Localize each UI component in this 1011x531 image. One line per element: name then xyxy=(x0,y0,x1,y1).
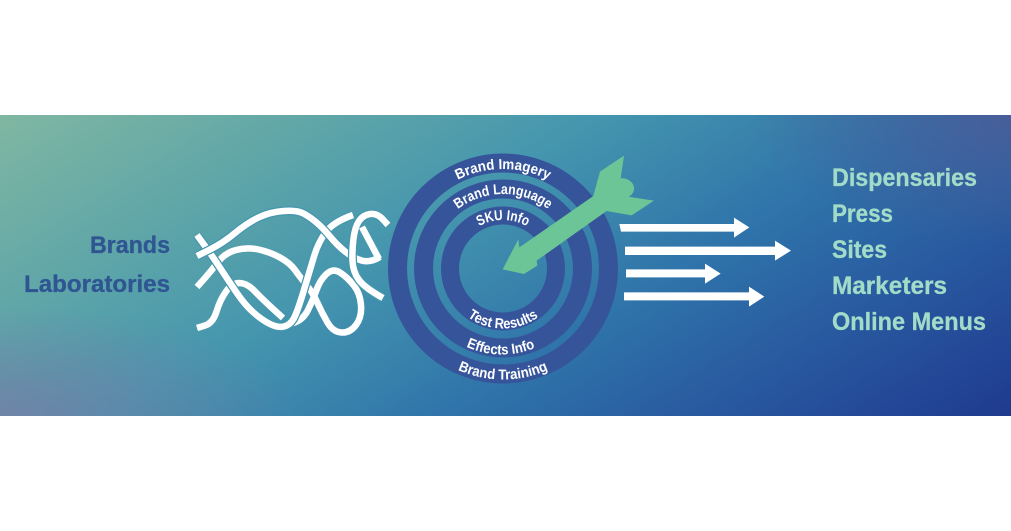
background band xyxy=(0,115,1011,416)
ring label: Brand Language: Brand Language xyxy=(452,184,552,209)
green dart arrow xyxy=(503,156,654,274)
tangled lines icon xyxy=(197,211,388,333)
four white arrows xyxy=(619,218,791,307)
label: Sites: Sites xyxy=(832,236,887,264)
ring label: Brand Training: Brand Training xyxy=(458,361,548,380)
ring labels xyxy=(452,158,552,380)
target rings xyxy=(398,163,608,374)
label: Press: Press xyxy=(832,200,893,228)
ring label: SKU Info: SKU Info xyxy=(476,210,529,226)
right labels xyxy=(832,164,986,336)
left labels xyxy=(24,232,170,298)
label: Dispensaries: Dispensaries xyxy=(832,164,977,192)
label: Marketers: Marketers xyxy=(832,272,947,300)
label: Brands: Brands xyxy=(90,232,170,259)
ring label: Brand Imagery: Brand Imagery xyxy=(454,158,552,180)
label: Laboratories: Laboratories xyxy=(24,271,170,298)
label: Online Menus: Online Menus xyxy=(832,308,986,336)
ring label: Test Results: Test Results xyxy=(470,308,538,329)
ring label: Effects Info: Effects Info xyxy=(467,338,534,355)
